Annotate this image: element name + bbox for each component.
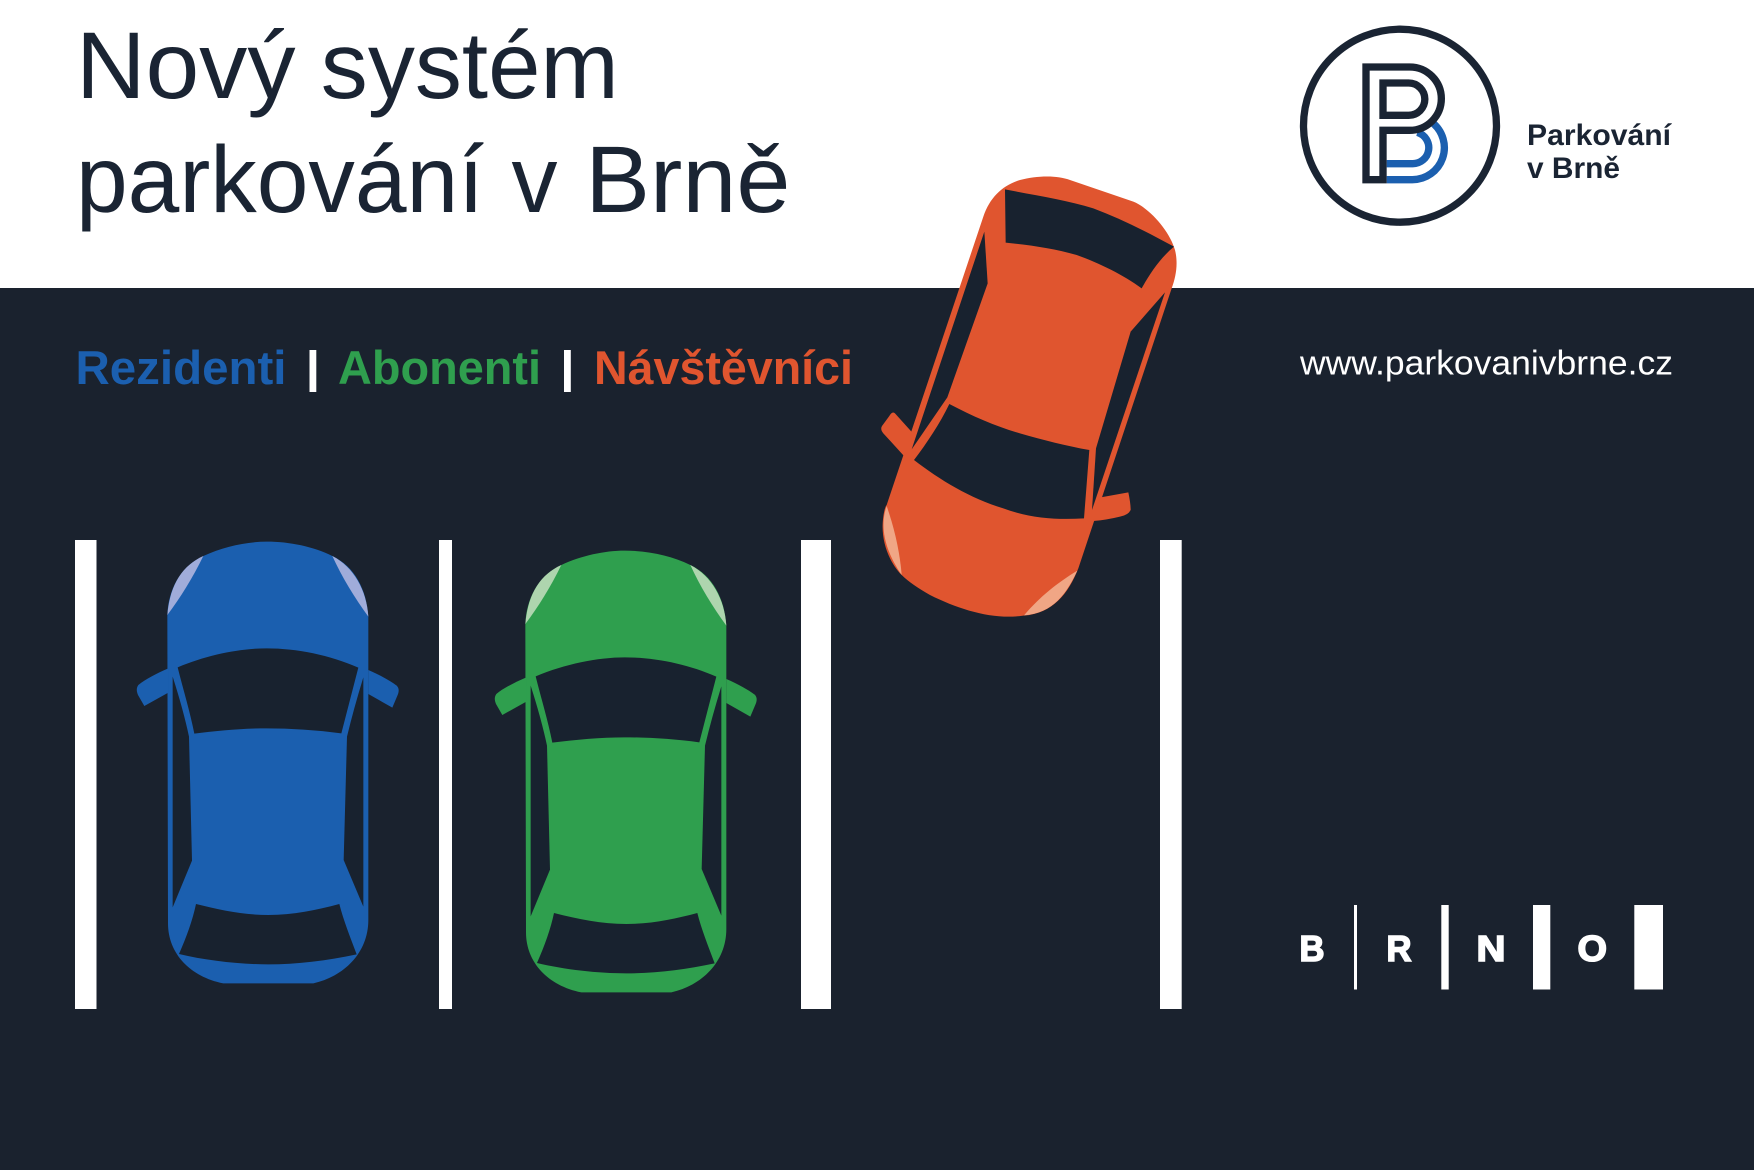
title: Nový <box>76 13 296 119</box>
windows <box>912 189 1174 519</box>
blue car <box>137 542 399 983</box>
windows <box>173 648 363 964</box>
headlights <box>883 506 1077 615</box>
dark parking lot background <box>0 288 1754 1170</box>
BRNO letters: R <box>1386 928 1412 969</box>
logo: Parkování v Brně <box>1304 29 1673 222</box>
BRNO bars <box>1354 905 1663 990</box>
car body <box>167 542 368 983</box>
separator <box>564 350 571 392</box>
website url: www.parkovanivbrne.cz <box>1299 344 1673 382</box>
title <box>76 13 790 233</box>
legend: parking categories <box>76 341 853 394</box>
green car <box>495 551 757 992</box>
left mirror <box>137 668 168 706</box>
BRNO letters: N <box>1476 928 1506 969</box>
windows <box>531 657 721 973</box>
title: v <box>512 127 558 233</box>
left mirror <box>495 677 526 715</box>
BRNO letters: B <box>1300 928 1324 969</box>
right mirror <box>368 670 399 708</box>
header band <box>0 0 1754 288</box>
BRNO letters: O <box>1578 928 1607 969</box>
separator <box>310 350 316 392</box>
left mirror <box>881 412 912 456</box>
label: Abonenti: Abonenti <box>338 341 541 394</box>
parking bay lines <box>75 540 1182 1009</box>
car body <box>525 551 726 992</box>
logo monogram PB <box>1366 67 1444 180</box>
headlights <box>167 556 368 617</box>
BRNO letters <box>1300 928 1607 969</box>
orange car <box>881 176 1177 617</box>
label: Návštěvníci: Návštěvníci <box>594 341 853 394</box>
title: Brně <box>585 127 790 233</box>
logo wordmark: v Brně <box>1527 152 1620 185</box>
logo wordmark: Parkování <box>1527 119 1673 152</box>
right mirror <box>726 679 757 717</box>
logo: BRNO city <box>1300 905 1663 990</box>
right mirror <box>1093 492 1131 521</box>
title: parkování <box>76 127 484 233</box>
car body <box>883 176 1177 617</box>
headlights <box>525 565 726 626</box>
logo wordmark <box>1527 119 1673 185</box>
title: systém <box>321 13 619 119</box>
logo circle <box>1304 29 1496 222</box>
label: Rezidenti: Rezidenti <box>76 341 286 394</box>
